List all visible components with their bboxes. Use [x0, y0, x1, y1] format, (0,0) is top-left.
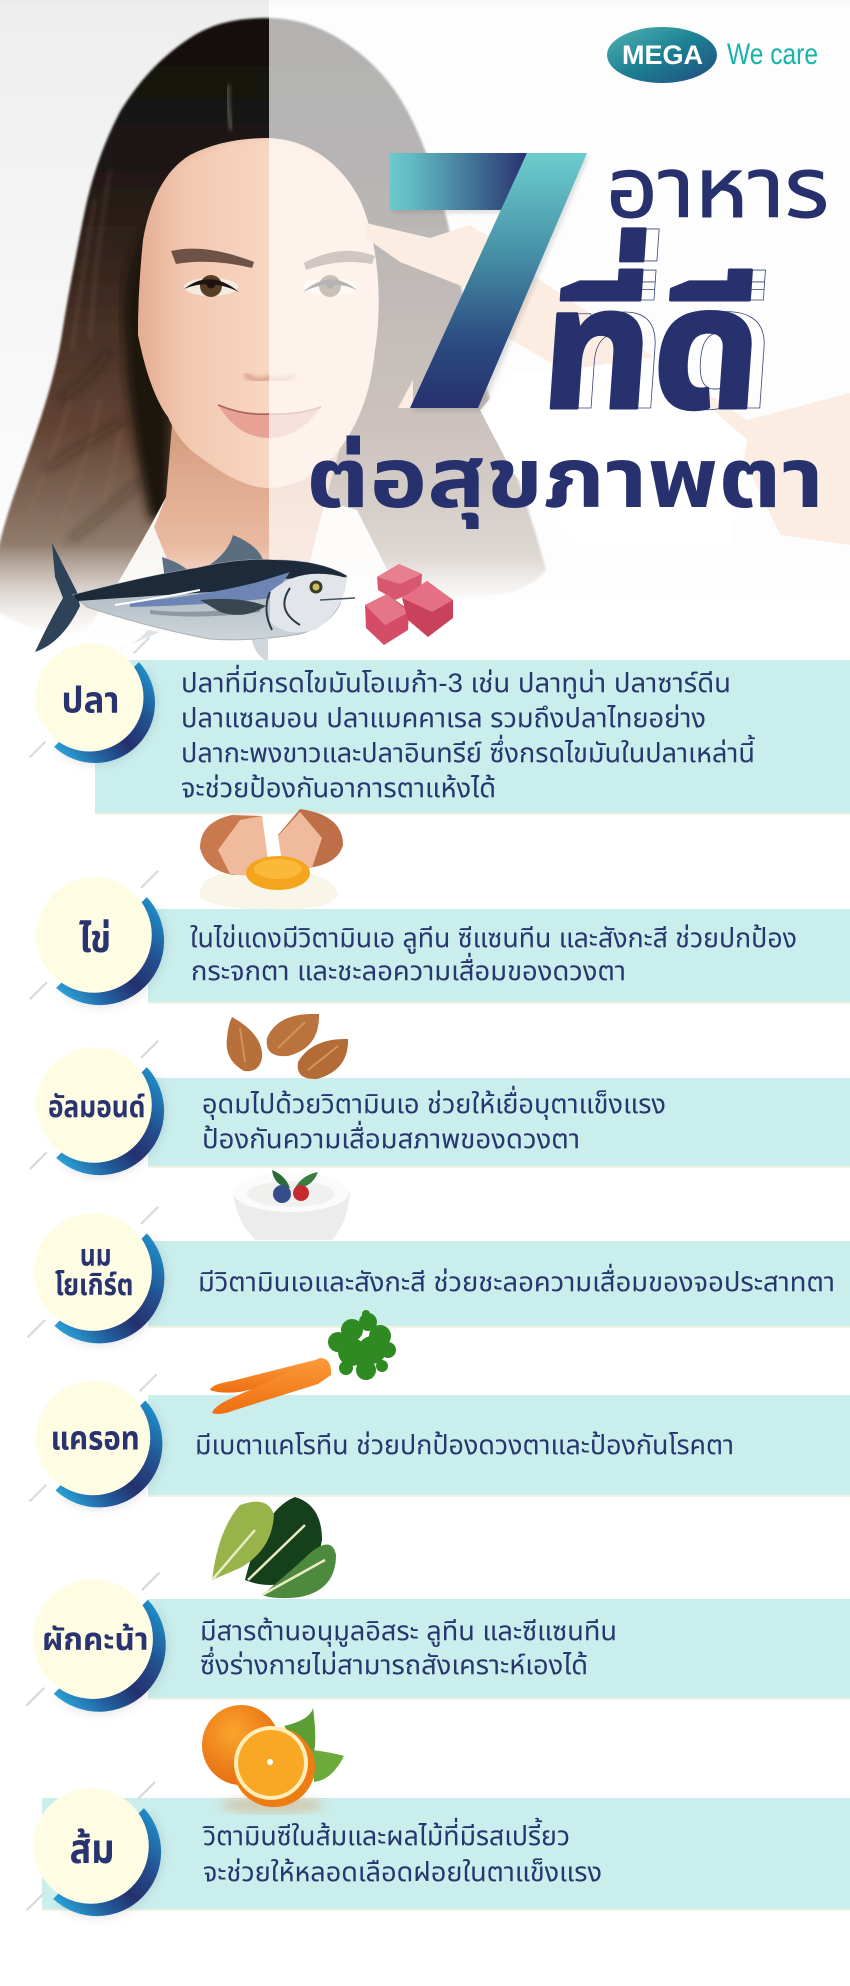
description: อัลมอนด์	[202, 1085, 666, 1154]
icon: tuna cubes	[365, 564, 453, 645]
logo: MEGA We care	[607, 27, 818, 83]
badge: ปลา	[30, 638, 156, 764]
badge: ผักคะน้า: ผักคะน้า	[42, 1622, 149, 1657]
badge: ปลา: ปลา	[62, 680, 120, 720]
description: อัลมอนด์: อุดมไปด้วยวิตามินเอ ช่วยให้เยื่อบุตาแข็งแรง	[202, 1085, 666, 1120]
description: ไข่: ในไข่แดงมีวิตามินเอ ลูทีน ซีแซนทีน และสังกะสี ช่วยปกป้อง	[190, 923, 797, 954]
icon: almonds	[227, 1014, 348, 1079]
logo: MEGA We care: MEGA	[622, 40, 703, 70]
badge: อัลมอนด์	[30, 1041, 165, 1176]
title: อาหาร: อาหาร	[606, 141, 829, 235]
badge: แครอท	[29, 1374, 163, 1508]
description: ส้ม: วิตามินซีในส้มและผลไม้ที่มีรสเปรี้ยว	[203, 1817, 570, 1851]
icon: kale leaves	[212, 1497, 336, 1598]
description: อัลมอนด์: ป้องกันความเสื่อมสภาพของดวงตา	[202, 1120, 580, 1154]
badge: ไข่	[30, 871, 165, 1006]
description: ไข่: กระจกตา และชะลอความเสื่อมของดวงตา	[191, 952, 626, 986]
panel: ไข่	[148, 909, 850, 1004]
description: ผักคะน้า: ซึ่งร่างกายไม่สามารถสังเคราะห์เองได้	[200, 1646, 588, 1680]
panel: อัลมอนด์	[148, 1078, 850, 1168]
title: ต่อสุขภาพตา: ต่อสุขภาพตา	[306, 431, 824, 529]
badge: นม โยเกิร์ต: โยเกิร์ต	[55, 1268, 133, 1302]
description: ส้ม	[203, 1817, 602, 1887]
description: ผักคะน้า	[200, 1616, 617, 1680]
badge: ส้ม: ส้ม	[70, 1826, 115, 1872]
photo: woman, half faded	[0, 0, 850, 662]
title: ที่ดี with outline echo: ที่ดี	[549, 229, 784, 445]
icon: oranges and leaves	[202, 1705, 344, 1813]
badge: นม โยเกิร์ต: นม	[80, 1238, 112, 1272]
description: ปลา: ปลากะพงขาวและปลาอินทรีย์ ซึ่งกรดไขมันในปลาเหล่านี้	[181, 734, 755, 768]
badge: แครอท: แครอท	[51, 1420, 140, 1457]
panel: แครอท	[148, 1395, 850, 1497]
description: ผักคะน้า: มีสารต้านอนุมูลอิสระ ลูทีน และซีแซนทีน	[200, 1616, 617, 1647]
logo: MEGA We care: We care	[727, 38, 818, 71]
description: ส้ม: จะช่วยให้หลอดเลือดฝอยในตาแข็งแรง	[203, 1857, 602, 1887]
badge: ส้ม	[27, 1782, 162, 1917]
panel: ปลา	[95, 660, 850, 815]
icon: egg	[200, 809, 343, 909]
badge: ไข่: ไข่	[79, 918, 111, 961]
description: ปลา: ปลาแซลมอน ปลาแมคคาเรล รวมถึงปลาไทยอย่าง	[181, 703, 706, 733]
title: ที่ดี with outline echo: ที่ดี	[535, 229, 770, 445]
panel: ส้ม	[42, 1798, 850, 1911]
badge: อัลมอนด์: อัลมอนด์	[48, 1091, 145, 1124]
description: ปลา: จะช่วยป้องกันอาการตาแห้งได้	[181, 773, 496, 803]
panel: ผักคะน้า	[148, 1599, 850, 1700]
title: numeral 7	[390, 153, 589, 411]
description: ปลา: ปลาที่มีกรดไขมันโอเมก้า-3 เช่น ปลาทูน่า ปลาซาร์ดีน	[181, 664, 731, 699]
description: แครอท: มีเบตาแคโรทีน ช่วยปกป้องดวงตาและป้องกันโรคตา	[195, 1430, 734, 1460]
description: ไข่	[190, 923, 797, 986]
icon: carrots	[210, 1310, 396, 1414]
icon: yogurt bowl with berries	[233, 1170, 350, 1240]
icon: tuna fish	[35, 535, 355, 662]
panel: นม โยเกิร์ต	[148, 1241, 850, 1328]
badge: ผักคะน้า	[26, 1572, 166, 1712]
badge: นม โยเกิร์ต	[28, 1207, 165, 1344]
description: นม โยเกิร์ต: มีวิตามินเอและสังกะสี ช่วยชะลอความเสื่อมของจอประสาทตา	[198, 1263, 835, 1297]
description: ปลา	[181, 664, 755, 803]
